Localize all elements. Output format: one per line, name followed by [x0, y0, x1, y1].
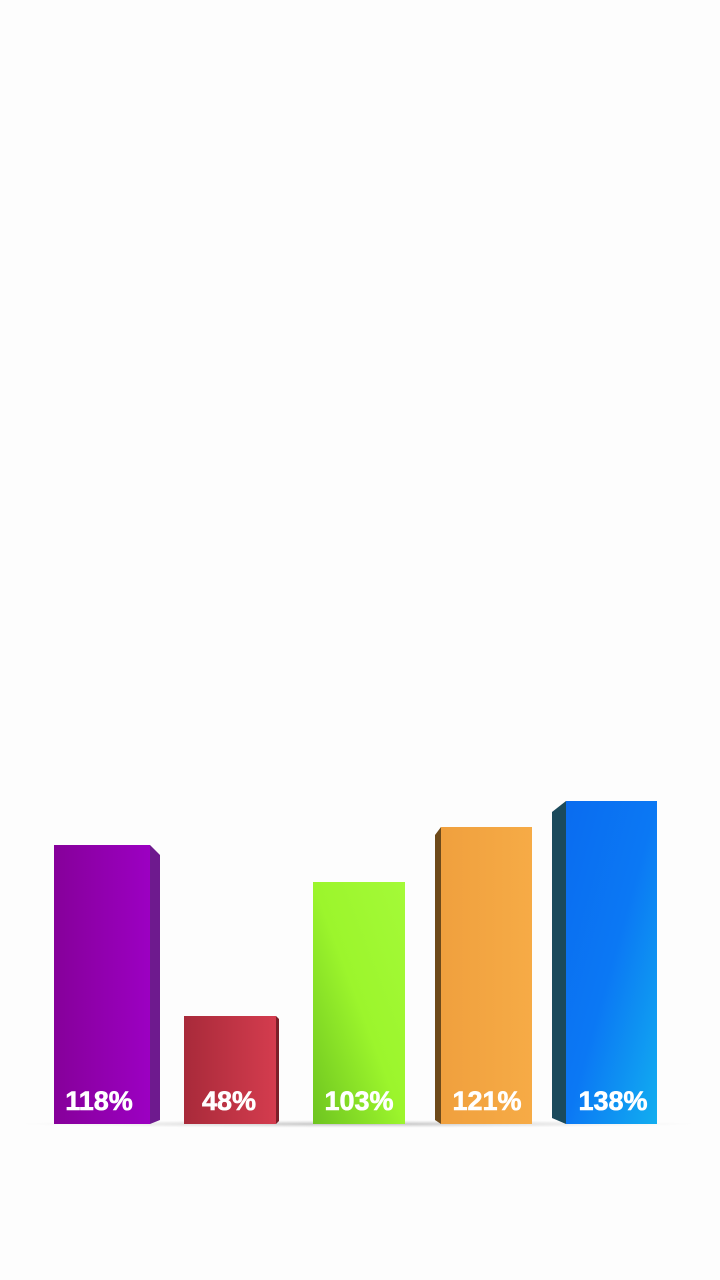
label: 138%: 138%: [578, 1086, 648, 1116]
label: 121%: 121%: [452, 1086, 522, 1116]
bar: 118% purple: [54, 845, 160, 1124]
label: 118%: 118%: [65, 1086, 133, 1116]
bar: 138% blue: [552, 801, 657, 1124]
label: 103%: 103%: [324, 1086, 394, 1116]
bar: 48% red: [184, 1016, 279, 1124]
label: 48%: 48%: [202, 1086, 256, 1116]
bar: 103% green: [313, 882, 405, 1124]
bar: 121% orange: [435, 827, 532, 1124]
floor shadow: [18, 1120, 698, 1128]
